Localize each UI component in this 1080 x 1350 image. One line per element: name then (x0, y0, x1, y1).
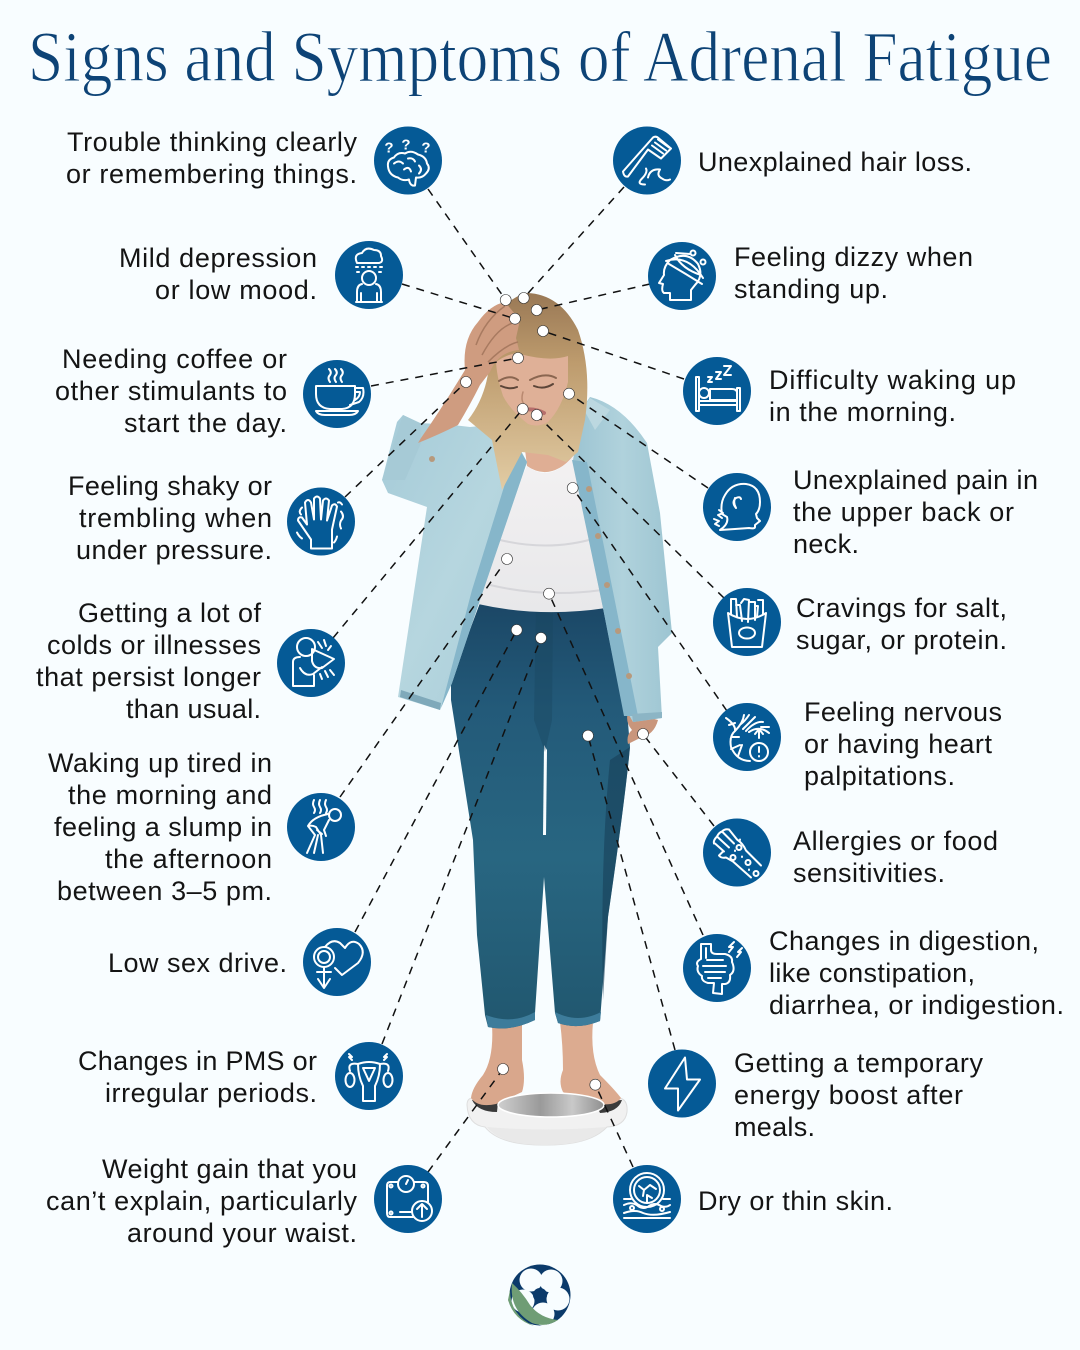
text: waking up tired: between 3–5 pm. (57, 876, 272, 906)
text: mild depression: or low mood. (155, 275, 317, 305)
denim jacket (382, 415, 527, 710)
text: allergies: sensitivities. (793, 858, 945, 888)
callout: trouble thinking (66, 126, 442, 194)
callout: digestion (683, 926, 1064, 1020)
callout: nervous (713, 697, 1002, 791)
raised arm and hand (418, 302, 520, 443)
text: mild depression: Mild depression (119, 243, 317, 273)
text: energy boost: energy boost after (734, 1080, 963, 1110)
callout: energy boost (648, 1048, 984, 1142)
hair (468, 293, 587, 490)
text: trouble thinking: or remembering things. (66, 159, 357, 189)
icon: french fries (713, 588, 781, 656)
text: changes in digestion: Changes in digestion, (769, 926, 1039, 956)
callout: cravings (713, 588, 1007, 656)
text: feeling shaky: trembling when (79, 503, 272, 533)
callout: dizzy (648, 242, 973, 310)
icon: coffee cup (303, 360, 371, 428)
icon: person sneezing (277, 629, 345, 697)
dashed connector lines (333, 187, 727, 1172)
callout: PMS (78, 1042, 403, 1110)
photo: woman on a scale (382, 293, 672, 1145)
jacket buttons (429, 456, 632, 679)
callout: allergies (703, 818, 998, 888)
text: feeling shaky: under pressure. (76, 535, 272, 565)
icon: heart with nerves and alert (713, 703, 781, 771)
jeans (451, 603, 630, 1028)
neck and chest (522, 425, 578, 472)
text: waking up tired: feeling a slump in (54, 812, 272, 842)
callout: waking tired (48, 748, 355, 906)
text: weight gain: around your waist. (127, 1218, 357, 1248)
text: needing coffee: other stimulants to (55, 376, 287, 406)
icon: brain with question marks: ? (421, 140, 431, 156)
facial features (499, 375, 556, 413)
feet (471, 1024, 524, 1105)
text: changes in digestion: diarrhea, or indigestion. (769, 990, 1064, 1020)
text: low sex drive: Low sex drive. (108, 948, 287, 978)
text: difficulty waking: in the morning. (769, 397, 956, 427)
text: cravings: Cravings for salt, (796, 593, 1007, 623)
callout: low sex drive (108, 928, 371, 996)
icon: intestines (683, 934, 751, 1002)
icon: person under rain cloud (335, 241, 403, 309)
callout: colds (36, 598, 345, 724)
text: weight gain: can’t explain, particularly (46, 1186, 358, 1216)
text: feeling nervous: palpitations. (804, 761, 955, 791)
icon: trembling hand (287, 488, 355, 556)
icon: brain with question marks: ? (384, 140, 394, 156)
text: feeling shaky: Feeling shaky or (68, 471, 272, 501)
icon: heart and female symbol (303, 928, 371, 996)
text: weight gain: Weight gain that you (102, 1154, 357, 1184)
text: feeling dizzy: standing up. (734, 274, 888, 304)
text: getting colds: Getting a lot of (78, 598, 261, 628)
icon: person in bed (683, 357, 751, 425)
icon: head and neck profile (703, 473, 771, 541)
text: trouble thinking: Trouble thinking clearly (67, 127, 358, 157)
icon: lightning bolt (648, 1050, 716, 1118)
text: getting colds: that persist longer (36, 662, 261, 692)
icon: comb with hair (613, 126, 681, 194)
text: feeling nervous: or having heart (804, 729, 992, 759)
text: allergies: Allergies or food (793, 826, 998, 856)
white tank top (478, 455, 606, 612)
text: energy boost: meals. (734, 1112, 815, 1142)
text: waking up tired: Waking up tired in (48, 748, 272, 778)
text: feeling dizzy: Feeling dizzy when (734, 242, 973, 272)
icon: brain with question marks: ? (401, 136, 411, 154)
text: feeling nervous: Feeling nervous (804, 697, 1002, 727)
text: cravings: sugar, or protein. (796, 625, 1007, 655)
icon: dizzy head (648, 242, 716, 310)
text: needing coffee: start the day. (124, 408, 287, 438)
right hand (627, 712, 658, 744)
text: changes in PMS: irregular periods. (105, 1078, 317, 1108)
text: waking up tired: the afternoon (105, 844, 272, 874)
callout: dry skin (613, 1165, 893, 1233)
text: difficulty waking: Difficulty waking up (769, 365, 1016, 395)
text: unexplained pain: neck. (793, 529, 859, 559)
icon: tired bent person (287, 793, 355, 861)
scale glass dial (498, 1093, 604, 1117)
text: hair loss: Unexplained hair loss. (698, 147, 972, 177)
callout: back and neck pain (703, 465, 1038, 559)
bathroom scale base (467, 1098, 627, 1145)
text: unexplained pain: the upper back or (793, 497, 1014, 527)
callout: weight gain (46, 1154, 442, 1248)
face (496, 354, 568, 426)
icon: scale with up arrow (374, 1165, 442, 1233)
text: waking up tired: the morning and (68, 780, 272, 810)
text: getting colds: than usual. (126, 694, 261, 724)
callout: hair loss (613, 126, 972, 194)
icon: skin layers (613, 1165, 681, 1233)
text: needing coffee: Needing coffee or (62, 344, 287, 374)
callout: coffee (55, 344, 371, 438)
text: energy boost: Getting a temporary (734, 1048, 984, 1078)
text: dry skin: Dry or thin skin. (698, 1186, 893, 1216)
text: changes in PMS: Changes in PMS or (78, 1046, 317, 1076)
icon: brain with question marks (374, 126, 442, 194)
body marker dots (460, 292, 648, 1090)
text: unexplained pain: Unexplained pain in (793, 465, 1038, 495)
icon: uterus (335, 1042, 403, 1110)
icon: hand with rash (703, 818, 771, 886)
callout: mild depression (119, 241, 403, 309)
logo (508, 1264, 570, 1326)
callout: shaky (68, 471, 355, 565)
text: getting colds: colds or illnesses (47, 630, 261, 660)
text: changes in digestion: like constipation, (769, 958, 975, 988)
callout: waking difficulty (683, 357, 1016, 427)
